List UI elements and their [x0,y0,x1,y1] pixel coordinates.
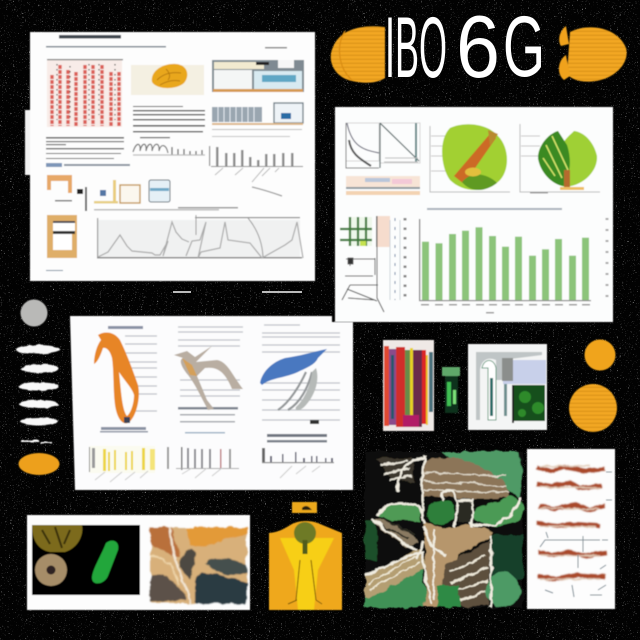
green grid swatch [340,216,390,247]
yellow bar chart [89,446,169,482]
panel heading [46,35,287,48]
cursive annotation and small ticks [133,144,205,155]
icon: left orange beetle [331,26,385,83]
icon row: rooms and devices [47,175,170,211]
green circuit strip [442,367,460,413]
panel: top-right leaf charts [335,107,613,322]
yellow tree card tag [292,502,317,513]
icon: right orange beetle [559,26,627,82]
red data table [47,59,123,127]
room diagram [212,60,304,92]
text block: left [46,137,130,167]
panel: red branch studies [527,449,615,609]
panel: seeds and painted landscape [27,515,250,610]
panel: top-left report [25,32,315,281]
caption strip under report [173,291,302,293]
bar chart [405,218,607,314]
tree landscape illustration [365,452,523,608]
icon: small orange circle [584,340,616,370]
leaf chart one [430,124,510,192]
panel: animal anatomy [70,316,353,490]
seahorse column [94,326,157,432]
decline curves [346,123,420,168]
painted landscape [150,527,247,603]
small bar chart [209,136,303,196]
wooden room thumbnail [47,215,77,258]
coloured pencils image [383,340,434,431]
line charts [46,207,303,271]
building section sketch [342,216,400,312]
title lettering: IBO [385,0,447,96]
chart caption [427,208,562,210]
leaf chart two [520,124,600,194]
legend brush strokes [16,345,60,444]
bird-skeleton column [174,327,243,434]
text block: centre [133,106,205,138]
yellow tree card [269,521,342,610]
icon: orange seed [18,453,60,475]
colour band [346,176,420,195]
icon: striped orange circle [569,384,617,432]
striped diagram with monitor [212,103,303,130]
icon: grey stone [20,300,48,326]
machine panel [468,344,547,430]
whale column [260,325,340,442]
specimen photo [32,525,140,595]
icon: brain illustration [131,64,204,95]
sparse bar chart [262,448,334,478]
grey bar chart [176,447,239,478]
title lettering: G [503,0,545,95]
